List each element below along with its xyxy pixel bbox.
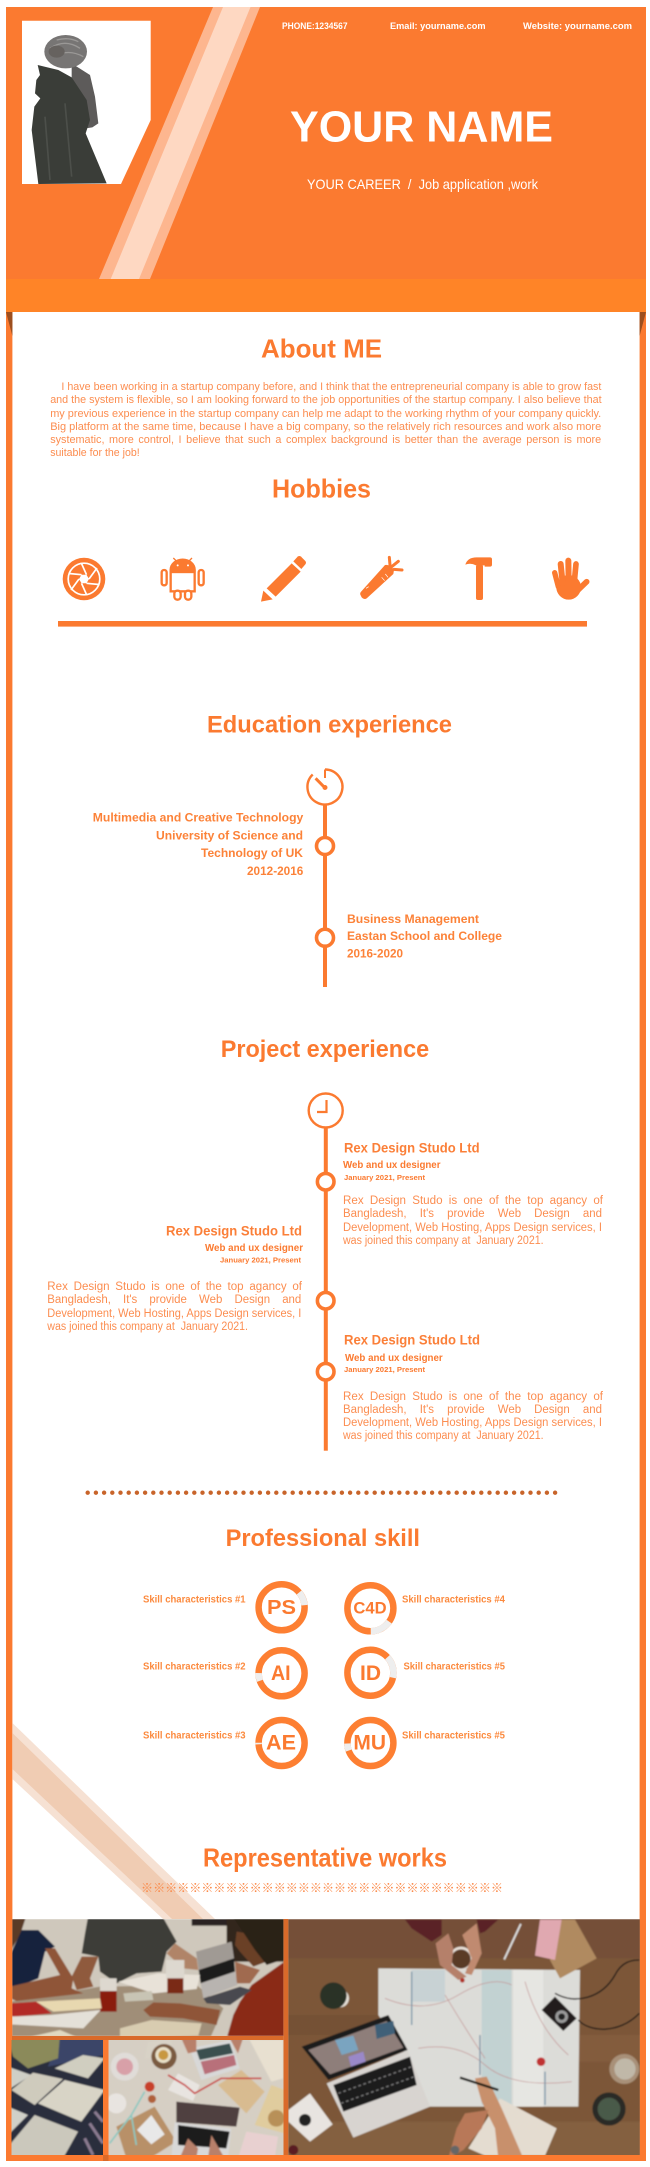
icon: camera aperture [63, 558, 105, 600]
header panel [6, 7, 646, 312]
photo: map on wooden table [285, 1915, 642, 2158]
dotted divider [88, 1490, 558, 1495]
education entry left: University of Science and [156, 829, 303, 843]
skill labels: Skill characteristics #1 [143, 1595, 246, 1606]
about me heading: About ME [261, 334, 382, 364]
skill labels: Skill characteristics #3 [143, 1731, 246, 1742]
education entry right [347, 912, 502, 961]
timeline node [316, 929, 334, 946]
skills heading: Professional skill [226, 1525, 420, 1552]
icon: hammer [465, 557, 492, 600]
photo: notes on desk [12, 2040, 103, 2155]
contact details [282, 21, 632, 31]
skill ring: C4D: C4D [353, 1599, 387, 1618]
icon: hand [555, 561, 587, 600]
diagonal decoration [12, 1723, 215, 1919]
skill ring: MU: MU [353, 1731, 386, 1754]
portrait photo [22, 21, 151, 184]
project entry 1: Rex Design Studo is one of the top agancy of [343, 1195, 604, 1207]
project entry 3: was joined this company at January 2021. [342, 1430, 544, 1442]
about me paragraph: and the system is flexible, so I am looking forward to the job opportunities of the startup company. I also believe that [50, 394, 602, 406]
skill labels: Skill characteristics #4 [402, 1595, 505, 1606]
timeline node [317, 1363, 334, 1380]
project entry 2: Rex Design Studo Ltd [166, 1222, 302, 1238]
orange band under header [6, 279, 646, 312]
skill ring: PS: PS [267, 1597, 296, 1619]
skill ring: AI [259, 1650, 305, 1696]
skill labels: Skill characteristics #5 [404, 1662, 505, 1673]
header diagonal stripe [99, 7, 260, 279]
icon: stopwatch [307, 770, 342, 804]
timeline node [317, 1292, 334, 1309]
education entry right: 2016-2020 [347, 947, 403, 961]
project timeline [309, 1094, 343, 1451]
project entry 3: Rex Design Studo is one of the top agancy of [343, 1391, 604, 1403]
hobbies icons [63, 556, 587, 602]
skill ring: ID [347, 1650, 393, 1696]
skill ring: AE [259, 1720, 305, 1766]
project entry 3: Bangladesh, It's provide Web Design and [343, 1404, 602, 1416]
skill labels [143, 1595, 505, 1742]
project entry 1 [342, 1139, 604, 1247]
skill labels: Skill characteristics #2 [143, 1662, 246, 1673]
project entry 1: Bangladesh, It's provide Web Design and [343, 1208, 602, 1220]
photo: team at table [10, 1915, 287, 2038]
skill ring: ID: ID [360, 1662, 381, 1685]
ornament row: ※※※※※※※※※※※※※※※※※※※※※※※※※※※※※※ [141, 1881, 503, 1895]
education timeline [307, 770, 342, 987]
icon: android [162, 558, 204, 600]
skill ring: AI: AI [271, 1662, 291, 1685]
project entry 3: Rex Design Studo Ltd [344, 1331, 480, 1347]
contact details: Email: yourname.com [390, 21, 486, 31]
education entry left [93, 811, 304, 878]
career line: YOUR CAREER / Job application ,work [307, 176, 539, 192]
timeline node [317, 1173, 334, 1190]
project entry 1: Rex Design Studo Ltd [344, 1139, 480, 1155]
photo: flat lay workspace [106, 2038, 286, 2158]
project entry 2: Development, Web Hosting, Apps Design services, I [47, 1308, 301, 1320]
project entry 1: Web and ux designer [343, 1159, 440, 1171]
skills chart [143, 1584, 505, 1766]
education entry left: Technology of UK [201, 846, 303, 860]
icon: clock [309, 1094, 343, 1128]
project entry 3: Development, Web Hosting, Apps Design services, I [343, 1417, 602, 1429]
about me paragraph: I have been working in a startup company before, and I think that the entrepreneurial company is able to grow fast [61, 381, 601, 393]
icon: carrot [360, 557, 402, 599]
about me paragraph: suitable for the job! [50, 447, 140, 459]
name: YOUR NAME [290, 103, 553, 152]
works heading: Representative works [203, 1843, 447, 1873]
education heading: Education experience [207, 712, 452, 739]
project heading: Project experience [221, 1036, 429, 1063]
contact details: Website: yourname.com [523, 21, 632, 31]
project entry 1: Development, Web Hosting, Apps Design services, I [343, 1222, 602, 1234]
icon: pencil [261, 556, 306, 602]
contact details: PHONE:1234567 [282, 21, 348, 31]
education entry left: 2012-2016 [247, 864, 304, 878]
project entry 3: Web and ux designer [345, 1352, 443, 1364]
project entry 2: was joined this company at January 2021. [46, 1321, 248, 1333]
project entry 3: January 2021, Present [344, 1365, 426, 1374]
project entry 2 [46, 1222, 303, 1333]
about me paragraph: systematic, more control, I believe that such a complex background is better than the average person is more [50, 434, 601, 446]
timeline node [316, 838, 334, 854]
project entry 3 [342, 1331, 604, 1442]
skill labels: Skill characteristics #5 [402, 1731, 505, 1742]
skill ring: PS [259, 1584, 305, 1630]
skill ring: C4D [347, 1585, 393, 1631]
project entry 2: Web and ux designer [205, 1242, 303, 1254]
project entry 2: January 2021, Present [220, 1256, 302, 1265]
project entry 1: January 2021, Present [344, 1173, 426, 1182]
about me paragraph [50, 381, 602, 459]
project entry 2: Rex Design Studo is one of the top agancy of [47, 1281, 303, 1293]
skill ring: AE: AE [266, 1731, 296, 1754]
project entry 1: was joined this company at January 2021. [342, 1235, 544, 1247]
photo dividers [12, 1919, 288, 2161]
education entry left: Multimedia and Creative Technology [93, 811, 304, 825]
about me paragraph: my previous experience in the startup company can help me adapt to the working rhythm of your company quickly. [50, 408, 601, 420]
education entry right: Eastan School and College [347, 929, 502, 943]
hobbies divider [58, 621, 587, 627]
education entry right: Business Management [347, 912, 479, 926]
skill ring: MU [347, 1720, 393, 1766]
about me paragraph: Big platform at the same time, because I have a big company, so the relatively rich resources and work also more [50, 421, 601, 433]
project entry 2: Bangladesh, It's provide Web Design and [47, 1294, 301, 1306]
hobbies heading: Hobbies [272, 474, 371, 504]
